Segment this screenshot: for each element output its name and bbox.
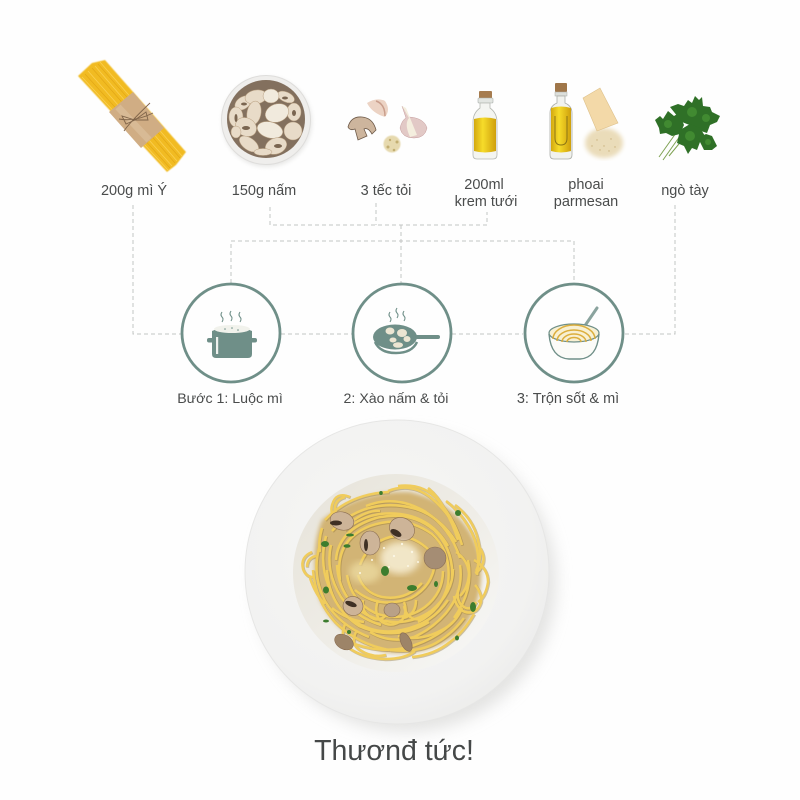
label: 200ml krem tươi <box>455 177 517 210</box>
pasta strands <box>303 486 489 660</box>
plate shadow <box>256 432 556 732</box>
label: phoai parmesan <box>554 177 618 210</box>
label: 200ml krem tươi: 200ml <box>464 177 504 193</box>
twine <box>119 103 153 131</box>
label: 3 tếc tỏi: 3 tếc tỏi <box>361 183 411 199</box>
ingredient: mushroom and garlic <box>348 99 427 152</box>
label: 200ml krem tươi: krem tưới <box>455 194 517 210</box>
closing caption: Thươnđ tức! <box>314 735 474 767</box>
ingredient: oil bottle and parmesan <box>550 83 623 159</box>
ingredient: small oil bottle <box>473 91 497 159</box>
ingredient: parsley <box>655 96 720 160</box>
grated parmesan <box>349 542 420 583</box>
step labels: Bước 1: Luộc mì <box>177 391 283 407</box>
garlic bulb <box>400 106 427 138</box>
ingredient: mushrooms in bowl <box>222 76 312 167</box>
garlic clove <box>367 99 388 117</box>
plate well <box>293 474 499 672</box>
ingredient: spaghetti bundle <box>78 60 186 172</box>
label: ngò tây: ngò tày <box>661 183 710 199</box>
plate <box>245 420 549 724</box>
label: phoai parmesan: phoai <box>568 177 604 193</box>
pasta base <box>314 492 481 653</box>
step labels <box>177 391 619 407</box>
final dish: plate of pasta <box>245 420 556 732</box>
paper band <box>109 92 164 148</box>
step 2 icon: frying pan <box>353 284 451 382</box>
parsley flecks <box>321 491 476 640</box>
step labels: 3: Trộn sốt & mì <box>517 391 619 407</box>
label: 200g mì Ý: 200g mì Ý <box>101 182 167 199</box>
step 3 icon: noodle bowl <box>525 284 623 382</box>
label: phoai parmesan: parmesan <box>554 194 618 210</box>
mushroom <box>348 117 376 140</box>
dashed connector lines <box>133 203 675 334</box>
minced garlic <box>384 136 400 152</box>
mushrooms <box>328 509 446 653</box>
step 1 icon: pot <box>182 284 280 382</box>
step labels: 2: Xào nấm & tỏi <box>344 391 448 407</box>
label: 150g nấm: 150g nấm <box>232 183 296 199</box>
